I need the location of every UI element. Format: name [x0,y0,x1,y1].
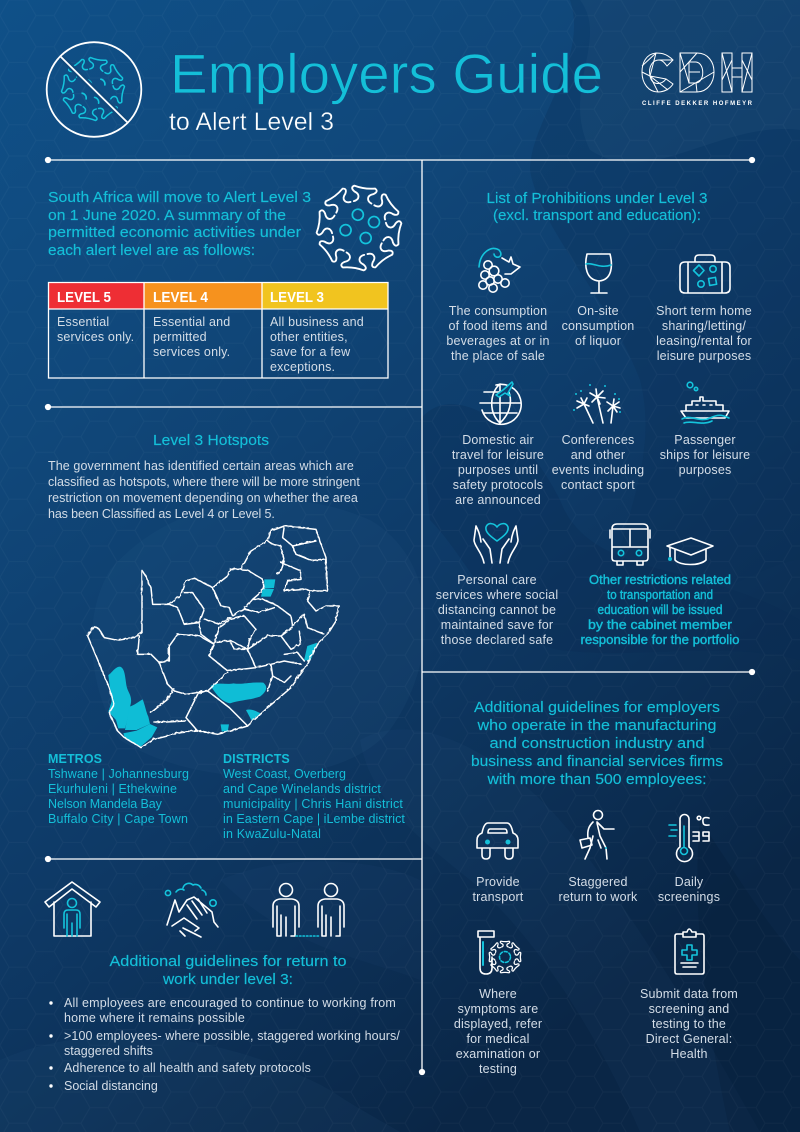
icon: graduation cap [667,538,713,564]
guideline: screenings: screenings [658,890,720,904]
other restrictions note: Other restrictions related [589,573,731,587]
metros list: Ekurhuleni | Ethekwine [48,782,177,796]
prohibition: liquor: of liquor [575,334,621,348]
other restrictions note: to transportation and [607,588,713,602]
prohibition: conferences: Conferences [562,433,634,447]
guideline: submit data: Submit data from [640,987,738,1001]
heading: additional guidelines for employers: who operate in the manufacturing [476,717,716,734]
districts list: and Cape Winelands district [223,782,381,796]
level 4 column: permitted [153,330,207,344]
intro text: each alert level are as follows: [48,242,255,259]
bullet list: staggered shifts [64,1044,153,1058]
guideline: symptoms: testing [479,1062,517,1076]
bullet list: Social distancing [64,1079,158,1093]
heading: additional guidelines for employers: and construction industry and [490,735,704,752]
logo: CDH [642,53,753,107]
guideline: screenings: Daily [675,875,704,889]
prohibition: air travel: purposes until [458,463,538,477]
guideline: submit data: screening and [649,1002,729,1016]
prohibition: air travel: safety protocols [453,478,543,492]
prohibition: personal care: services where social [436,588,558,602]
metros list: METROS [48,752,102,766]
icon: test tube and virus [478,931,521,974]
guideline: symptoms [454,987,542,1076]
level 5 column [49,283,144,344]
other restrictions note: responsible for the portfolio [580,633,740,647]
prohibition: personal care [436,573,558,647]
guideline: submit data: testing to the [652,1017,726,1031]
level 4 column: Essential and [153,315,230,329]
prohibition: food: The consumption [449,304,547,318]
prohibition: food: of food items and [449,319,547,333]
metros list: Tshwane | Johannesburg [48,767,189,781]
intro text: permitted economic activities under [48,224,301,241]
heading: prohibitions: (excl. transport and education): [493,207,701,224]
prohibition: conferences [552,433,644,492]
icon: bus [610,524,650,565]
heading: hotspots: Level 3 Hotspots [153,432,269,449]
level 3 column: other entities, [270,330,348,344]
other restrictions note: education will be issued [598,603,723,617]
intro text [48,189,311,259]
icon: ship [681,382,729,423]
guideline: screenings [658,875,720,904]
icon: suitcase [680,255,730,293]
prohibition: personal care: maintained save for [441,618,553,632]
heading: return to work guidelines [110,953,346,988]
prohibition: air travel: travel for leisure [452,448,544,462]
level 4 column: services only. [153,345,230,359]
guideline: staggered return: return to work [559,890,638,904]
prohibition: liquor: consumption [562,319,634,333]
subtitle: to Alert Level 3 [169,108,334,136]
level 3 column: save for a few [270,345,351,359]
prohibition: air travel: Domestic air [462,433,534,447]
districts list: DISTRICTS [223,752,290,766]
level 4 column [144,283,262,359]
prohibition: liquor: On-site [577,304,619,318]
prohibition: air travel: are announced [455,493,541,507]
metros list [48,752,189,826]
prohibition: conferences: contact sport [561,478,635,492]
map: South Africa [87,525,338,747]
guideline: symptoms: Where [479,987,517,1001]
icon: wine glass [586,254,611,293]
hotspots paragraph: The government has identified certain areas which are [48,459,354,473]
other restrictions note [580,573,740,647]
prohibition: home sharing: sharing/letting/ [662,319,746,333]
bullet list: home where it remains possible [64,1011,245,1025]
prohibition: home sharing [656,304,752,363]
map hotspots [108,579,317,747]
bullet list: >100 employees- where possible, staggered working hours/ [64,1029,400,1043]
level 5 column: services only. [57,330,134,344]
icon: hands and heart [474,524,518,563]
level 5 column: Essential [57,315,109,329]
guideline: submit data: Direct General: [646,1032,732,1046]
hotspots paragraph: restriction on movement depending on whether the area [48,491,358,505]
prohibition: food: the place of sale [451,349,545,363]
icon: washing hands [165,883,218,937]
districts list: municipality | Chris Hani district [223,797,403,811]
districts list: in Eastern Cape | iLembe district [223,812,405,826]
prohibition: liquor [562,304,634,348]
guideline: submit data [640,987,738,1061]
heading: additional guidelines for employers: with more than 500 employees: [486,771,706,788]
prohibition: personal care: Personal care [457,573,537,587]
heading: prohibitions: List of Prohibitions under Level 3 [486,190,708,207]
districts list: in KwaZulu-Natal [223,827,321,841]
icon: no virus [47,42,141,137]
heading: prohibitions [486,190,708,224]
level 3 column [262,283,388,374]
prohibition: conferences: events including [552,463,644,477]
level 3 column: exceptions. [270,360,335,374]
icon: walking person [580,810,614,859]
districts list: West Coast, Overberg [223,767,346,781]
bullet list [49,996,400,1093]
prohibition: ships: Passenger [674,433,736,447]
icon: thermometer [669,814,709,862]
level 4 column: LEVEL 4 [153,290,208,306]
districts list [223,752,405,841]
prohibition: home sharing: leisure purposes [657,349,751,363]
hotspots paragraph: has been Classified as Level 4 or Level 5. [48,507,275,521]
bullet list: All employees are encouraged to continue to working from [64,996,396,1010]
level 5 column: LEVEL 5 [57,290,111,306]
other restrictions note: by the cabinet member [588,618,732,632]
heading: additional guidelines for employers: Additional guidelines for employers [474,699,720,716]
heading: return to work guidelines: Additional guidelines for return to [110,953,346,970]
guideline: symptoms: displayed, refer [454,1017,542,1031]
prohibition: food [446,304,550,363]
prohibition: personal care: those declared safe [441,633,553,647]
prohibition: air travel [452,433,544,507]
heading: additional guidelines for employers [471,699,723,788]
icon: car [477,823,518,859]
hotspots paragraph: classified as hotspots, where there will be more stringent [48,475,360,489]
guideline: transport [473,875,524,904]
title: Employers Guide [170,42,603,105]
prohibition: ships [660,433,750,477]
heading: additional guidelines for employers: business and financial services firms [471,753,723,770]
icon: virus [312,181,406,275]
prohibition: ships: purposes [679,463,731,477]
metros list: Nelson Mandela Bay [48,797,163,811]
icon: clipboard [675,929,704,974]
guideline: symptoms: symptoms are [458,1002,538,1016]
icon: person at home [45,882,100,936]
guideline: transport: transport [473,890,524,904]
prohibition: conferences: and other [571,448,625,462]
dividers [46,158,754,1074]
prohibition: home sharing: Short term home [656,304,752,318]
icon: globe with plane [480,382,521,424]
hotspots paragraph [48,459,360,521]
intro text: South Africa will move to Alert Level 3 [48,189,311,206]
table: alert levels [48,282,388,378]
guideline: submit data: Health [670,1047,708,1061]
prohibition: personal care: distancing cannot be [438,603,556,617]
icon: fireworks [574,385,620,423]
heading: return to work guidelines: work under level 3: [162,971,293,988]
prohibition: food: beverages at or in [446,334,550,348]
bullet list: Adherence to all health and safety protocols [64,1061,311,1075]
guideline: transport: Provide [476,875,520,889]
guideline: symptoms: for medical [466,1032,530,1046]
guideline: symptoms: examination or [456,1047,540,1061]
guideline: staggered return [559,875,638,904]
level 3 column: LEVEL 3 [270,290,324,306]
icon: two people distanced [273,884,344,936]
intro text: on 1 June 2020. A summary of the [48,207,286,224]
level 3 column: All business and [270,315,364,329]
icon: grapes [479,248,520,292]
prohibition: ships: ships for leisure [660,448,750,462]
prohibition: home sharing: leasing/rental for [656,334,752,348]
logo: CDH: CLIFFE DEKKER HOFMEYR [642,101,753,107]
metros list: Buffalo City | Cape Town [48,812,188,826]
guideline: staggered return: Staggered [568,875,628,889]
